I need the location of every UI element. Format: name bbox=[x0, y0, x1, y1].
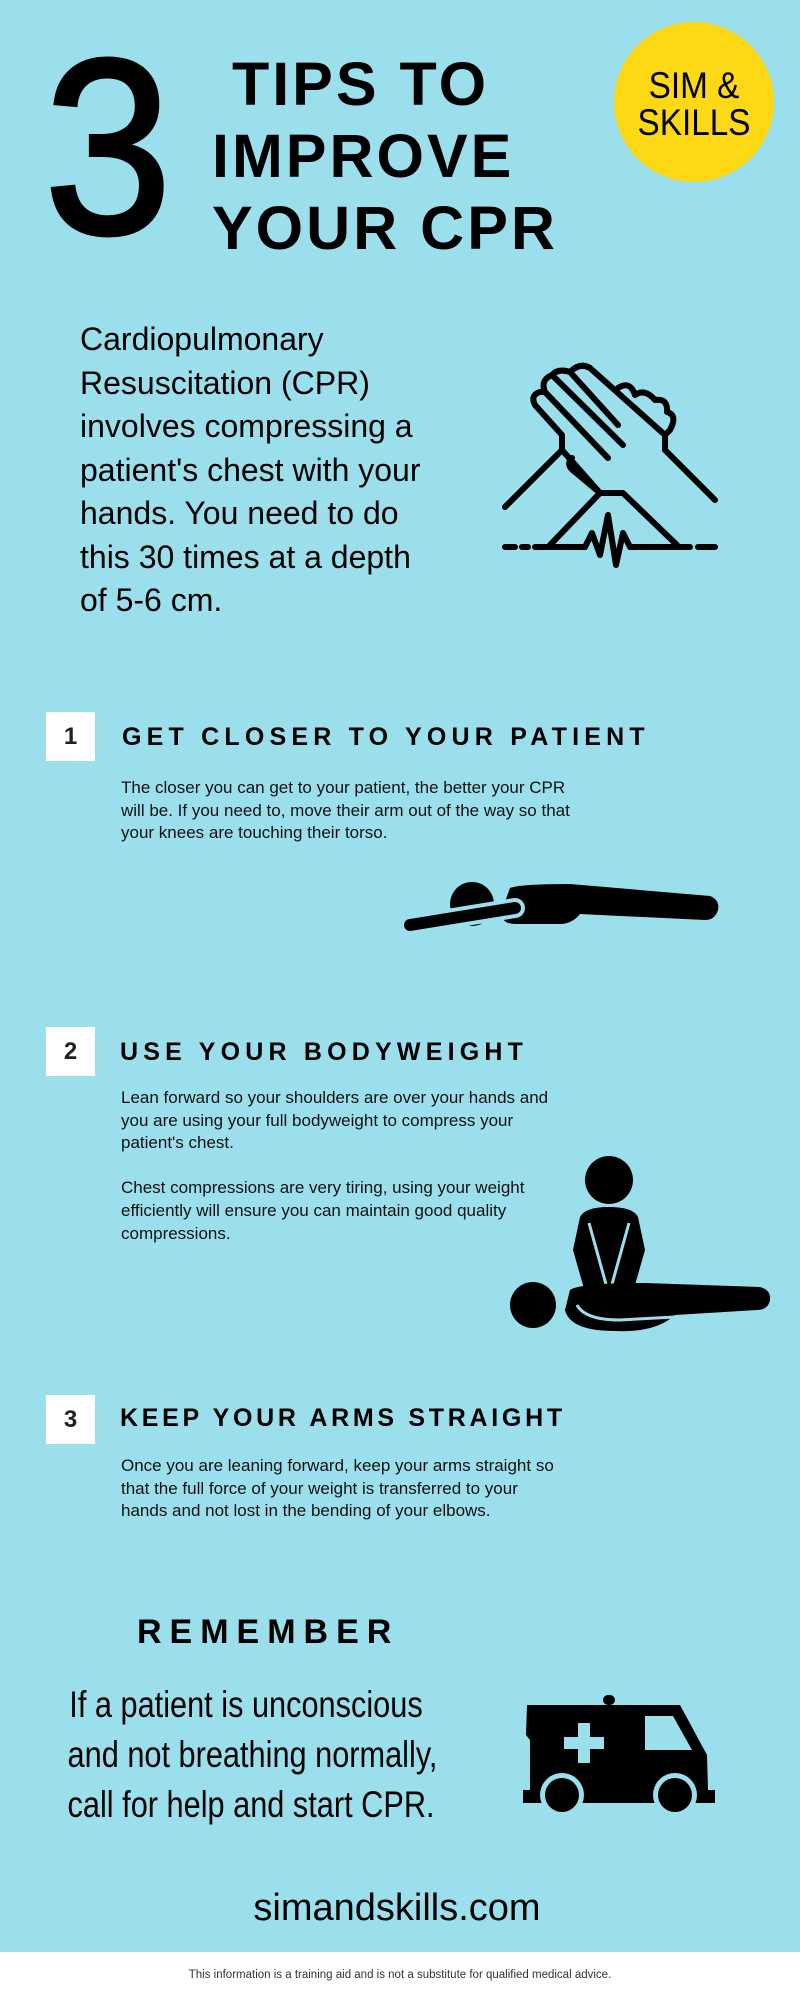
intro text: Resuscitation (CPR) bbox=[80, 364, 370, 400]
tip 3 text: Once you are leaning forward, keep your arms straight so bbox=[121, 1456, 554, 1475]
tip 2 heading: USE YOUR BODYWEIGHT bbox=[120, 1038, 528, 1066]
tip 1 number bbox=[46, 712, 95, 761]
intro text: patient's chest with your bbox=[80, 452, 420, 488]
remember text bbox=[68, 1684, 437, 1825]
website: simandskills.com bbox=[253, 1887, 541, 1929]
icon: ambulance bbox=[523, 1695, 715, 1812]
tip 3 number bbox=[46, 1395, 95, 1444]
remember text: and not breathing normally, bbox=[68, 1734, 437, 1775]
title: TIPS TO bbox=[232, 50, 489, 118]
tip 3 heading: KEEP YOUR ARMS STRAIGHT bbox=[120, 1404, 566, 1432]
intro text: of 5-6 cm. bbox=[80, 582, 222, 618]
icon: person performing CPR bbox=[510, 1156, 770, 1332]
tip 2 number bbox=[46, 1027, 95, 1076]
tip 3 number: 3 bbox=[64, 1406, 77, 1433]
tip 3 text bbox=[121, 1456, 554, 1520]
logo: Sim & Skills bbox=[614, 22, 774, 182]
big number 3: 3 bbox=[44, 7, 172, 286]
intro text: involves compressing a bbox=[80, 408, 413, 444]
tip 2 text: you are using your full bodyweight to compress your bbox=[121, 1111, 513, 1130]
tip 1 text: your knees are touching their torso. bbox=[121, 823, 387, 842]
tip 2 text: Lean forward so your shoulders are over your hands and bbox=[121, 1088, 548, 1107]
remember text: call for help and start CPR. bbox=[68, 1784, 435, 1825]
footer disclaimer: This information is a training aid and is not a substitute for qualified medical advice. bbox=[189, 1969, 611, 1981]
intro text: hands. You need to do bbox=[80, 495, 399, 531]
icon: patient lying bbox=[404, 882, 718, 931]
tip 1 text: The closer you can get to your patient, the better your CPR bbox=[121, 778, 565, 797]
title: IMPROVE bbox=[212, 122, 514, 190]
intro text: Cardiopulmonary bbox=[80, 321, 324, 357]
tip 2 text: compressions. bbox=[121, 1224, 231, 1243]
tip 1 text: will be. If you need to, move their arm out of the way so that bbox=[121, 801, 570, 820]
tip 2 text: Chest compressions are very tiring, using your weight bbox=[121, 1178, 524, 1197]
tip 1 heading: GET CLOSER TO YOUR PATIENT bbox=[122, 723, 650, 751]
tip 3 text: hands and not lost in the bending of your elbows. bbox=[121, 1501, 491, 1520]
tip 1 text bbox=[121, 778, 570, 842]
tip 1 number: 1 bbox=[64, 723, 77, 750]
tip 2 text: efficiently will ensure you can maintain good quality bbox=[121, 1201, 506, 1220]
intro text bbox=[80, 321, 420, 618]
title bbox=[212, 50, 558, 262]
remember heading: REMEMBER bbox=[137, 1613, 399, 1651]
logo: Sim & Skills: SIM & bbox=[649, 65, 739, 106]
tip 2 text: patient's chest. bbox=[121, 1133, 234, 1152]
footer disclaimer bbox=[0, 1952, 800, 2000]
intro text: this 30 times at a depth bbox=[80, 538, 411, 574]
remember text: If a patient is unconscious bbox=[69, 1684, 423, 1725]
icon: hands compressing chest bbox=[502, 362, 718, 568]
tip 3 text: that the full force of your weight is transferred to your bbox=[121, 1479, 518, 1498]
tip 2 text bbox=[121, 1088, 548, 1243]
tip 2 number: 2 bbox=[64, 1038, 77, 1065]
title: YOUR CPR bbox=[212, 194, 558, 262]
logo: Sim & Skills: SKILLS bbox=[638, 102, 750, 143]
